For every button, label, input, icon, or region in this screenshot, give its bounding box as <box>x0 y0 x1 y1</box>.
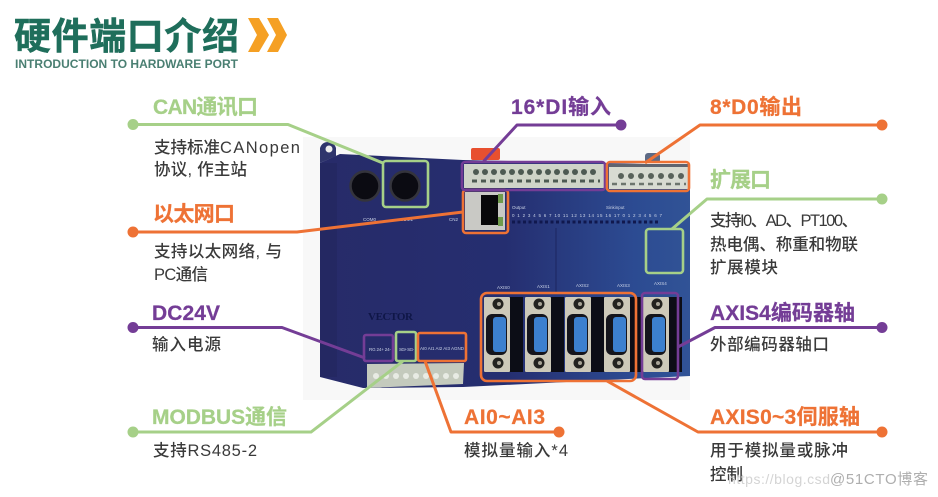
axis connectors: AXIS2 <box>576 283 589 288</box>
callout: MODBUS: MODBUS通信 <box>152 406 287 429</box>
indicator strip: Output <box>512 205 526 210</box>
callout: AXIS0~3: AXIS0~3伺服轴 <box>710 406 860 429</box>
power terminal labels: SG+ SG- <box>399 347 414 352</box>
bottom terminal block <box>367 363 464 388</box>
callout: expansion port: 支持I0、AD、PT100、 <box>710 211 858 230</box>
ethernet jack <box>465 192 505 230</box>
photo: controller device <box>303 137 690 400</box>
icon: double chevron <box>248 18 287 52</box>
callout: AXIS0~3: 用于模拟量或脉冲 <box>710 441 848 460</box>
callout: CAN: CANopen <box>220 139 301 157</box>
callout: AXIS4 <box>642 293 888 379</box>
subtitle: INTRODUCTION TO HARDWARE PORT <box>15 57 239 71</box>
callout: expansion port <box>646 169 888 277</box>
axis connectors: AXIS3 <box>617 283 630 288</box>
DI terminal block <box>464 164 605 188</box>
photo: controller device: COM1 <box>400 217 413 222</box>
callout: 16*DI: 16*DI输入 <box>511 96 611 119</box>
callout: 16*DI <box>462 96 626 190</box>
callout: expansion port: 扩展模块 <box>710 258 778 277</box>
callout: CAN <box>128 96 428 207</box>
logo: VECTOR <box>368 311 414 323</box>
callout: AI0~AI3: 模拟量输入*4 <box>464 441 568 460</box>
callout: Ethernet <box>128 190 508 284</box>
DO terminal block <box>609 164 688 189</box>
callout: AXIS0~3: 控制 <box>710 465 743 484</box>
power terminal labels <box>369 346 465 352</box>
callout: 8*DO: 8*D0输出 <box>710 96 802 119</box>
callout: DC24V: 输入电源 <box>152 335 222 354</box>
callout: 8*DO <box>607 96 888 191</box>
callout: DC24V <box>128 302 393 361</box>
indicator strip <box>512 205 662 222</box>
callout: CAN: 协议, 作主站 <box>154 160 247 179</box>
axis connectors <box>484 281 682 372</box>
watermark: https://blog.csd <box>728 471 830 487</box>
callout: AI0~AI3: AI0~AI3 <box>464 406 545 429</box>
power terminal labels: AI0 AI1 AI2 AI3 AGND <box>420 346 465 351</box>
power terminal labels: RG 24+ 24- <box>369 347 392 352</box>
callout: AXIS4: AXIS4编码器轴 <box>710 301 855 325</box>
watermark <box>728 471 928 488</box>
callout: MODBUS <box>128 332 416 460</box>
callout: Ethernet: 支持以太网络, 与 <box>154 241 282 261</box>
callout: expansion port: 热电偶、称重和物联 <box>710 235 858 254</box>
callout: AXIS0~3 <box>481 293 888 484</box>
title: 硬件端口介绍 <box>14 16 239 57</box>
callout: MODBUS: 支持RS485-2 <box>153 441 257 460</box>
photo: controller device: CN2 <box>449 217 458 222</box>
axis connectors: AXIS1 <box>537 284 550 289</box>
callout: expansion port: 扩展口 <box>710 169 771 192</box>
callout: AI0~AI3 <box>418 333 568 460</box>
watermark: @51CTO博客 <box>830 471 928 488</box>
device labels: COM0 <box>363 217 376 222</box>
callout: AXIS4: 外部编码器轴口 <box>710 335 829 354</box>
callout: Ethernet: 以太网口 <box>153 203 235 226</box>
callout: CAN: CAN通讯口 <box>153 96 258 119</box>
indicator strip: 0 1 2 3 4 5 6 7 10 11 12 13 14 15 16 17 0 1 2 3 4 5 6 7 <box>512 213 662 218</box>
callout: DC24V: DC24V <box>152 302 220 325</box>
round ports <box>350 172 420 200</box>
callout: Ethernet: PC通信 <box>154 265 208 284</box>
callout: CAN: 支持标准 <box>154 138 220 157</box>
indicator strip: Sinkinput <box>606 205 625 210</box>
axis connectors: AXIS0 <box>497 285 510 290</box>
axis connectors: AXIS4 <box>654 281 667 286</box>
